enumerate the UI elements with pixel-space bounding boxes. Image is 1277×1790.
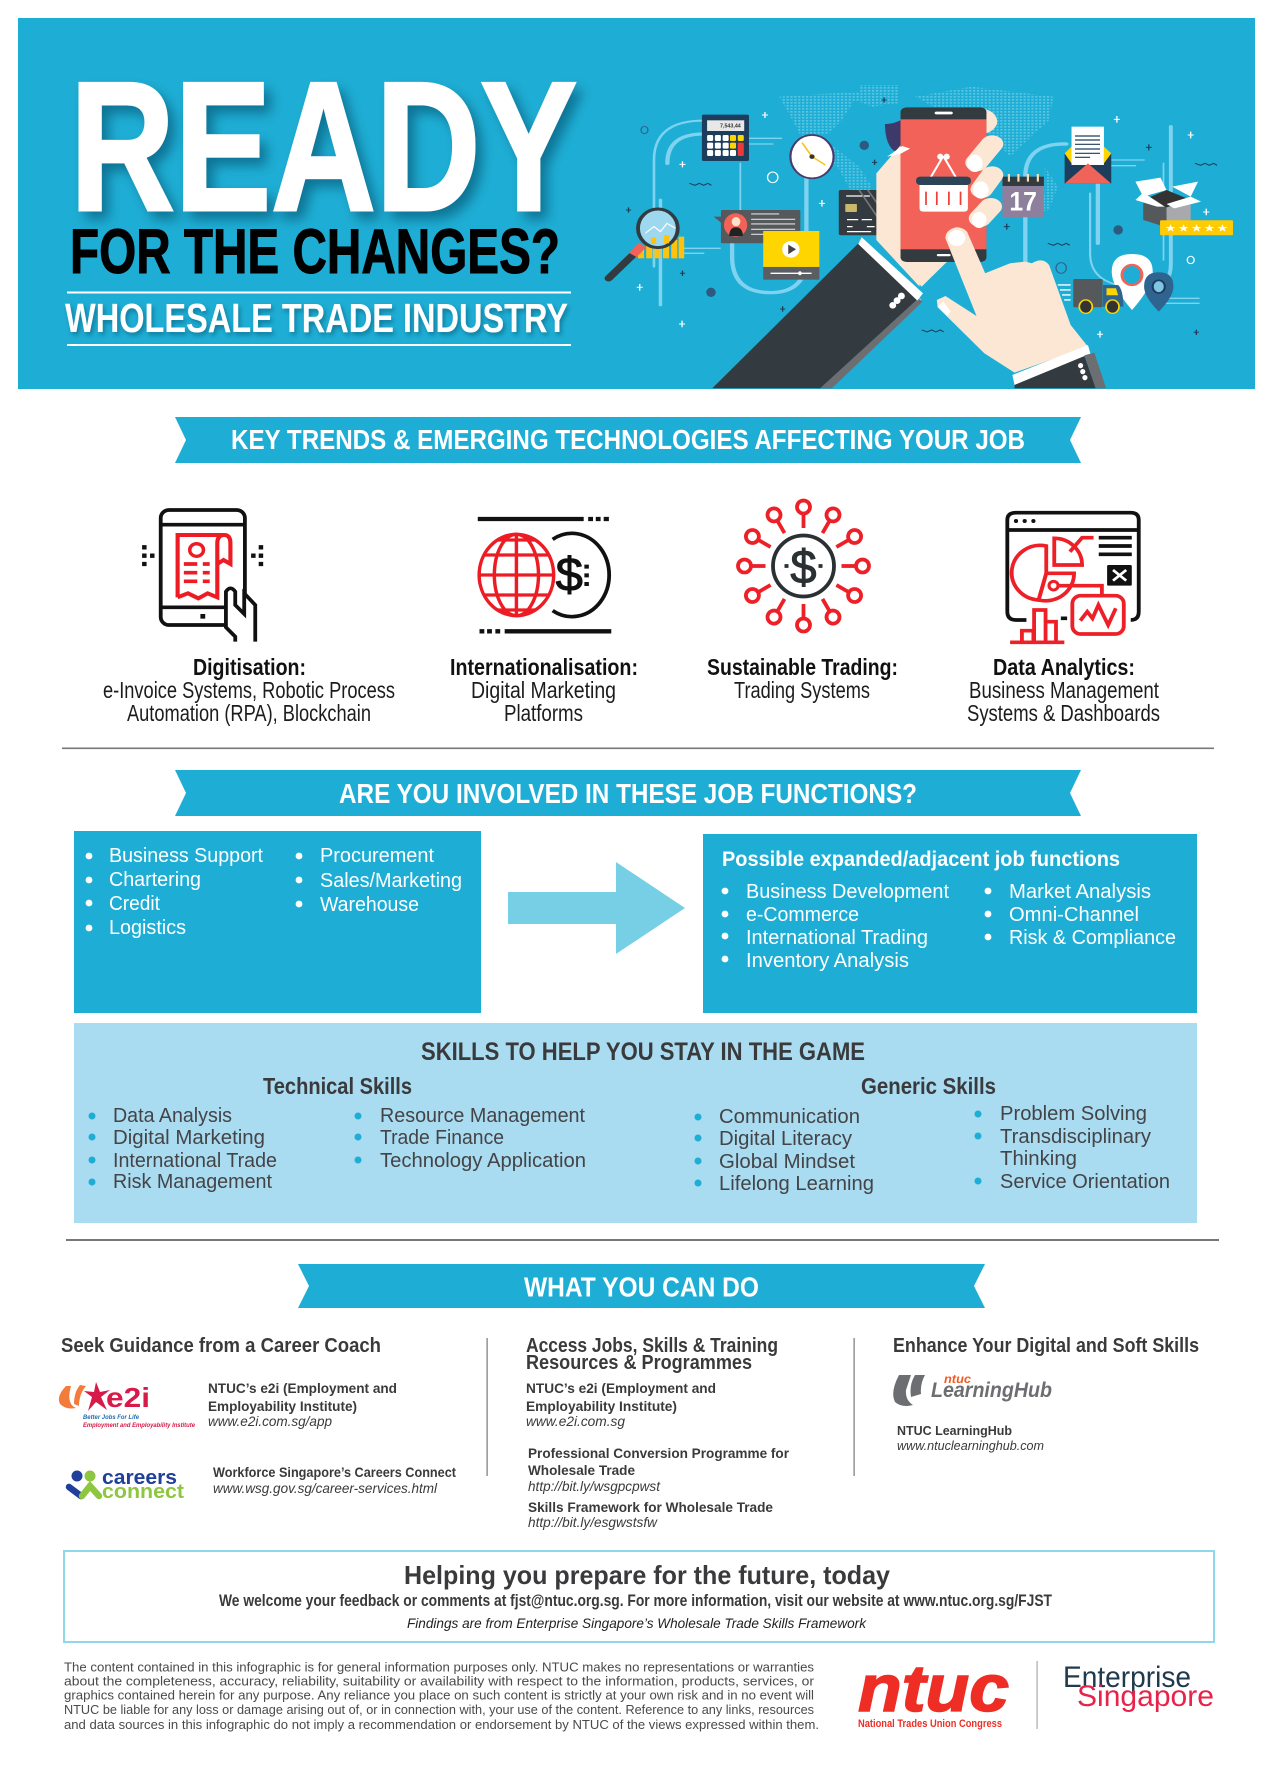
text: digitisation: e-Invoice Systems, Robotic Process: [103, 677, 395, 703]
text: internationalisation: Internationalisation:: [450, 654, 638, 680]
text: sustainable trading: Trading Systems: [734, 677, 870, 703]
disclaimer: The content contained in this infographic is for general information purposes only. NTUC makes no representations or warranties: [64, 1660, 814, 1674]
phone: [901, 107, 986, 262]
callout: helping you prepare: Helping you prepare for the future, today: [404, 1560, 891, 1590]
generic skills column: Communication: [719, 1106, 860, 1128]
icon: calendar: [1002, 174, 1044, 217]
world map dots: [779, 85, 1058, 213]
subtitle: wholesale trade industry: WHOLESALE TRADE INDUSTRY: [65, 295, 568, 341]
generic skills column: Generic Skills: [861, 1073, 996, 1099]
text: data analytics: [967, 654, 1160, 726]
pointing hand and sleeve: [937, 227, 1106, 388]
disclaimer: and data sources in this infographic do not imply a recommendation or endorsement by NTUC of the views expressed within them.: [64, 1718, 819, 1732]
header illustration: hands holding phone with business icons: [609, 85, 1233, 388]
panel: current job functions: [74, 831, 481, 1013]
logo: e2i: Employment and Employability Institute: [83, 1422, 195, 1429]
callout: helping you prepare: Findings are from Enterprise Singapore’s Wholesale Trade Skills Framework: [407, 1615, 867, 1631]
column: jobs, skills and training resources: Wholesale Trade: [528, 1462, 635, 1478]
technical skills column: Technology Application: [380, 1150, 586, 1172]
technical skills column: [88, 1073, 586, 1193]
panel: expanded job functions: e-Commerce: [746, 904, 859, 926]
technical skills column: Resource Management: [380, 1105, 585, 1127]
header panel: [18, 18, 1255, 389]
technical skills column: Trade Finance: [380, 1127, 504, 1149]
panel: current job functions: Procurement: [320, 845, 434, 867]
column: career coach: Seek Guidance from a Career Coach: [61, 1335, 381, 1357]
banner: job functions: ARE YOU INVOLVED IN THESE JOB FUNCTIONS?: [339, 778, 917, 809]
technical skills column: International Trade: [113, 1150, 277, 1172]
logo: NTUC LearningHub: LearningHub: [931, 1379, 1052, 1402]
icon: video player: [763, 231, 819, 280]
logo: Enterprise Singapore: [1063, 1661, 1214, 1713]
banner: what you can do: [298, 1264, 985, 1308]
callout: helping you prepare: We welcome your feedback or comments at fjst@ntuc.org.sg. For more information, visit our website at www.ntuc.org.sg/FJST: [219, 1591, 1052, 1610]
panel: expanded job functions: [703, 834, 1197, 1013]
icon: profile message card: [714, 210, 800, 243]
panel: expanded job functions: Market Analysis: [1009, 881, 1151, 903]
generic skills column: Digital Literacy: [719, 1128, 852, 1150]
generic skills column: Problem Solving: [1000, 1103, 1147, 1125]
icon: magnifier with chart: [609, 209, 684, 278]
column: career coach: www.e2i.com.sg/app: [208, 1413, 332, 1429]
logo: NTUC LearningHub: ntuc: [944, 1372, 971, 1386]
generic skills column: Thinking: [1000, 1148, 1077, 1170]
technical skills column: Digital Marketing: [113, 1127, 265, 1149]
arrow: [508, 862, 685, 954]
column: digital and soft skills: [893, 1335, 1199, 1453]
column: jobs, skills and training resources: Employability Institute): [526, 1398, 677, 1414]
logo: NTUC LearningHub: [893, 1372, 1052, 1406]
panel: expanded job functions: Business Development: [746, 881, 949, 903]
panel: skills: [74, 1023, 1197, 1223]
column: jobs, skills and training resources: Professional Conversion Programme for: [528, 1445, 790, 1461]
column: digital and soft skills: www.ntuclearninghub.com: [897, 1438, 1044, 1453]
text: digitisation: [103, 654, 395, 726]
icon: digitisation tablet: [142, 510, 263, 642]
generic skills column: Lifelong Learning: [719, 1173, 874, 1195]
banner: key trends: [175, 417, 1081, 463]
panel: current job functions: Business Support: [109, 845, 263, 867]
icon: calendar: 17: [1009, 186, 1037, 217]
callout: helping you prepare: [64, 1551, 1214, 1642]
connecting tracks: [654, 121, 1199, 333]
skills heading: SKILLS TO HELP YOU STAY IN THE GAME: [421, 1038, 865, 1066]
panel: current job functions: Credit: [109, 893, 160, 915]
generic skills column: Service Orientation: [1000, 1171, 1170, 1193]
column: jobs, skills and training resources: http://bit.ly/wsgpcpwst: [528, 1478, 661, 1494]
icon: credit card: [839, 190, 878, 235]
logo: careers connect: careers: [102, 1467, 177, 1489]
logo: Enterprise Singapore: Enterprise: [1063, 1661, 1191, 1694]
text: internationalisation: Platforms: [504, 700, 583, 726]
column: career coach: www.wsg.gov.sg/career-services.html: [213, 1480, 438, 1496]
panel: current job functions: Logistics: [109, 917, 186, 939]
technical skills column: Technical Skills: [263, 1073, 412, 1099]
technical skills column: Data Analysis: [113, 1105, 232, 1127]
text: data analytics: Data Analytics:: [993, 654, 1135, 680]
icon: shield: [885, 119, 902, 152]
column: digital and soft skills: NTUC LearningHub: [897, 1423, 1012, 1438]
logo: e2i: [59, 1382, 195, 1429]
text: data analytics: Business Management: [969, 677, 1159, 703]
disclaimer: about the completeness, accuracy, reliability, suitability or availability with respect to the information, products, services, or: [64, 1674, 814, 1688]
text: internationalisation: Digital Marketing: [471, 677, 616, 703]
icon: location pins and truck: [1058, 254, 1173, 313]
generic skills column: Transdisciplinary: [1000, 1126, 1151, 1148]
panel: expanded job functions: Inventory Analysis: [746, 950, 909, 972]
panel: expanded job functions: International Trading: [746, 927, 928, 949]
text: sustainable trading: [707, 654, 898, 703]
icon: sustainable trading network: [738, 500, 869, 632]
panel: expanded job functions: Possible expanded/adjacent job functions: [722, 848, 1120, 871]
banner: what you can do: WHAT YOU CAN DO: [524, 1272, 759, 1302]
column: jobs, skills and training resources: [526, 1335, 790, 1530]
icon: internationalisation globe and coin: $: [556, 548, 583, 601]
column: jobs, skills and training resources: Skills Framework for Wholesale Trade: [528, 1499, 773, 1515]
panel: current job functions: Sales/Marketing: [320, 870, 462, 892]
icon: five-star rating: ★★★★★: [1165, 224, 1228, 234]
icon: data analytics dashboard: [1007, 513, 1139, 642]
icon: internationalisation globe and coin: [478, 519, 611, 631]
icon: calculator: [702, 115, 749, 161]
panel: expanded job functions: Omni-Channel: [1009, 904, 1139, 926]
icon: sustainable trading network: $: [790, 540, 817, 593]
text: internationalisation: [450, 654, 638, 726]
column: jobs, skills and training resources: Resources & Programmes: [526, 1352, 752, 1374]
icon: envelope: [1065, 127, 1111, 184]
logo: e2i: Better Jobs For Life: [83, 1414, 139, 1421]
disclaimer: NTUC be liable for any loss or damage arising out of, or in connection with, your use of the content. Reference to any links, resources: [64, 1703, 814, 1717]
icon: five-star rating: [1160, 220, 1233, 235]
icon: parcel box: [1135, 178, 1201, 227]
logo: careers connect: [69, 1467, 184, 1503]
small decorative marks: [626, 97, 1217, 338]
column: jobs, skills and training resources: Access Jobs, Skills & Training: [526, 1335, 778, 1357]
text: digitisation: Digitisation:: [193, 654, 306, 680]
panel: current job functions: Chartering: [109, 869, 201, 891]
panel: expanded job functions: Risk & Compliance: [1009, 927, 1176, 949]
logo: NTUC: National Trades Union Congress: [858, 1718, 1002, 1730]
icon: clock: [790, 135, 834, 178]
generic skills column: Global Mindset: [719, 1151, 855, 1173]
column: digital and soft skills: Enhance Your Digital and Soft Skills: [893, 1335, 1199, 1357]
column: career coach: Employability Institute): [208, 1398, 357, 1414]
column: career coach: NTUC’s e2i (Employment and: [208, 1380, 397, 1396]
column: career coach: [59, 1335, 456, 1503]
icon: calculator: 7,543,44: [720, 124, 741, 129]
banner: key trends: KEY TRENDS & EMERGING TECHNOLOGIES AFFECTING YOUR JOB: [231, 424, 1025, 455]
hand holding phone: [876, 107, 997, 287]
banner: job functions: [175, 770, 1081, 816]
technical skills column: Risk Management: [113, 1171, 272, 1193]
column: career coach: Workforce Singapore’s Careers Connect: [213, 1464, 456, 1480]
suit sleeve: [712, 237, 923, 388]
generic skills column: [694, 1073, 1170, 1195]
text: digitisation: Automation (RPA), Blockchain: [127, 700, 371, 726]
logo: NTUC: ntuc: [858, 1651, 1009, 1725]
logo: Enterprise Singapore: Singapore: [1077, 1680, 1214, 1713]
text: data analytics: Systems & Dashboards: [967, 700, 1160, 726]
disclaimer: graphics contained herein for any purpose. Any reliance you place on such content is strictly at your own risk and in no event will: [64, 1688, 814, 1702]
column: jobs, skills and training resources: NTUC’s e2i (Employment and: [526, 1380, 716, 1396]
text: sustainable trading: Sustainable Trading:: [707, 654, 898, 680]
title: READY: READY: [70, 43, 577, 249]
disclaimer: [64, 1660, 819, 1732]
column: jobs, skills and training resources: www.e2i.com.sg: [526, 1413, 625, 1429]
panel: current job functions: Warehouse: [320, 894, 419, 916]
logo: careers connect: connect: [102, 1481, 184, 1503]
column: jobs, skills and training resources: http://bit.ly/esgwstsfw: [528, 1514, 658, 1530]
subtitle: for the changes: FOR THE CHANGES?: [70, 217, 560, 287]
logo: e2i: e2i: [106, 1382, 150, 1413]
